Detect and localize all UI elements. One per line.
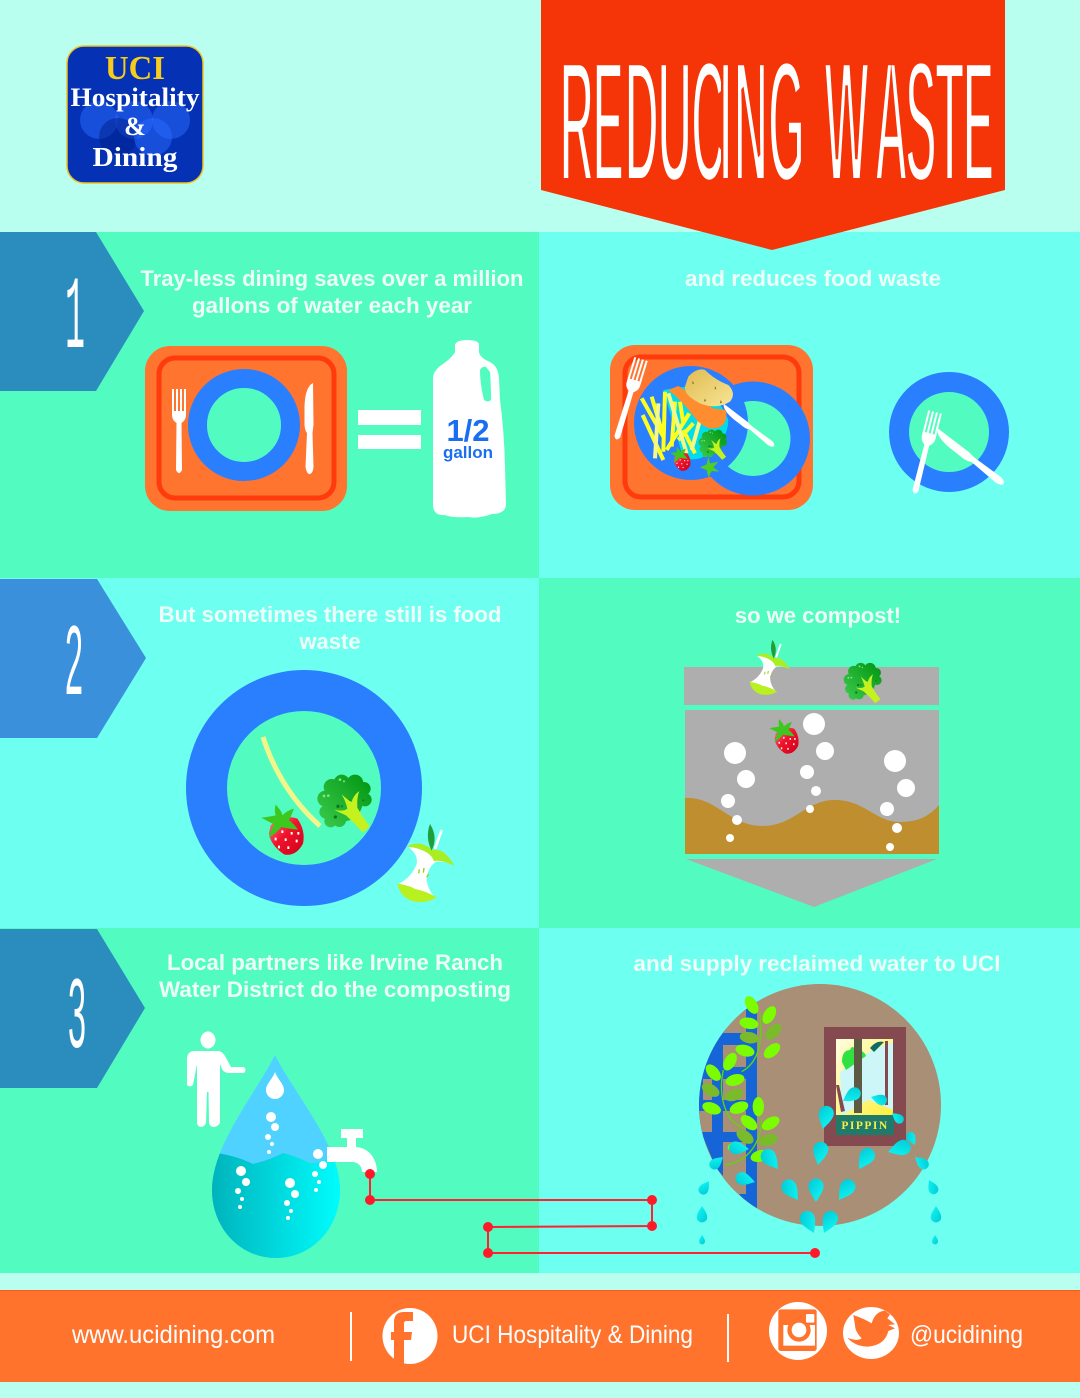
heading: tray-less dining: gallons of water each year: [192, 293, 472, 318]
step 2 arrow: 2: [65, 605, 83, 715]
icon: empty tray with plate: [145, 346, 347, 511]
step 1 arrow: [0, 232, 144, 391]
heading: local partners: Water District do the composting: [159, 977, 511, 1002]
panel: step 1 right: [539, 232, 1080, 578]
heading: reduces food waste: and reduces food waste: [685, 266, 941, 291]
website: www.ucidining.com: [71, 1321, 275, 1349]
trellis: [695, 1001, 757, 1212]
icon: person: [187, 1032, 246, 1127]
heading: still food waste: [158, 602, 502, 654]
heading: local partners: Local partners like Irvine Ranch: [167, 950, 503, 975]
step 3 arrow: 3: [68, 958, 86, 1068]
step 1 arrow: 1: [65, 261, 85, 379]
icon: clean plate with cutlery: [899, 382, 1006, 495]
heading: so we compost: so we compost!: [735, 603, 901, 628]
step 2 arrow: [0, 579, 146, 738]
logo wordmark: &: [124, 112, 146, 141]
title: REDUCING WASTE: [559, 24, 994, 221]
panel: step 3 left: [0, 928, 539, 1273]
heading: local partners: [159, 950, 511, 1002]
logo wordmark: Hospitality: [70, 83, 200, 112]
icon: faucet: [327, 1129, 377, 1172]
icon: facebook: [382, 1308, 438, 1364]
heading: still food waste: But sometimes there still is food: [158, 602, 502, 627]
icon: half gallon jug: [433, 340, 506, 518]
footer bar: [0, 1290, 1080, 1382]
heading: reclaimed water: and supply reclaimed water to UCI: [634, 951, 1000, 976]
panel: step 1 left: [0, 232, 539, 578]
vines: [699, 994, 784, 1165]
illustration: plate with leftovers: [206, 690, 454, 902]
heading: tray-less dining: Tray-less dining saves over a million: [140, 266, 524, 291]
panel: step 2 left: [0, 578, 539, 928]
water droplets: [697, 1085, 941, 1244]
icon: instagram: [769, 1302, 827, 1360]
heading: tray-less dining: [140, 266, 524, 318]
heading: still food waste: waste: [298, 629, 361, 654]
window: [824, 1027, 906, 1146]
illustration: compost bin: [684, 640, 939, 907]
step 3 arrow: [0, 929, 145, 1088]
icon: twitter: [843, 1307, 899, 1359]
title banner: [541, 0, 1005, 250]
illustration: building wall with window, vines and water drops: [695, 984, 941, 1244]
twitter handle: @ucidining: [910, 1321, 1023, 1349]
logo wordmark: Dining: [92, 142, 178, 172]
icon: half gallon jug: gallon: [443, 443, 493, 462]
logo wordmark: UCI: [105, 50, 165, 87]
icon: equals sign: [358, 410, 421, 449]
icon: water drop with faucet: [205, 1050, 377, 1260]
icon: full tray with food and plates: [610, 345, 813, 510]
label: 1/2 gallon: 1/2: [446, 413, 490, 448]
logo wordmark: [70, 50, 200, 172]
panel: step 2 right: [539, 578, 1080, 928]
pipeline connecting faucet to building: [365, 1169, 820, 1258]
panel: step 3 right: [539, 928, 1080, 1273]
sign text: PIPPIN: [841, 1120, 889, 1132]
logo: UCI Hospitality & Dining: [67, 46, 203, 183]
facebook name: UCI Hospitality & Dining: [452, 1321, 693, 1349]
